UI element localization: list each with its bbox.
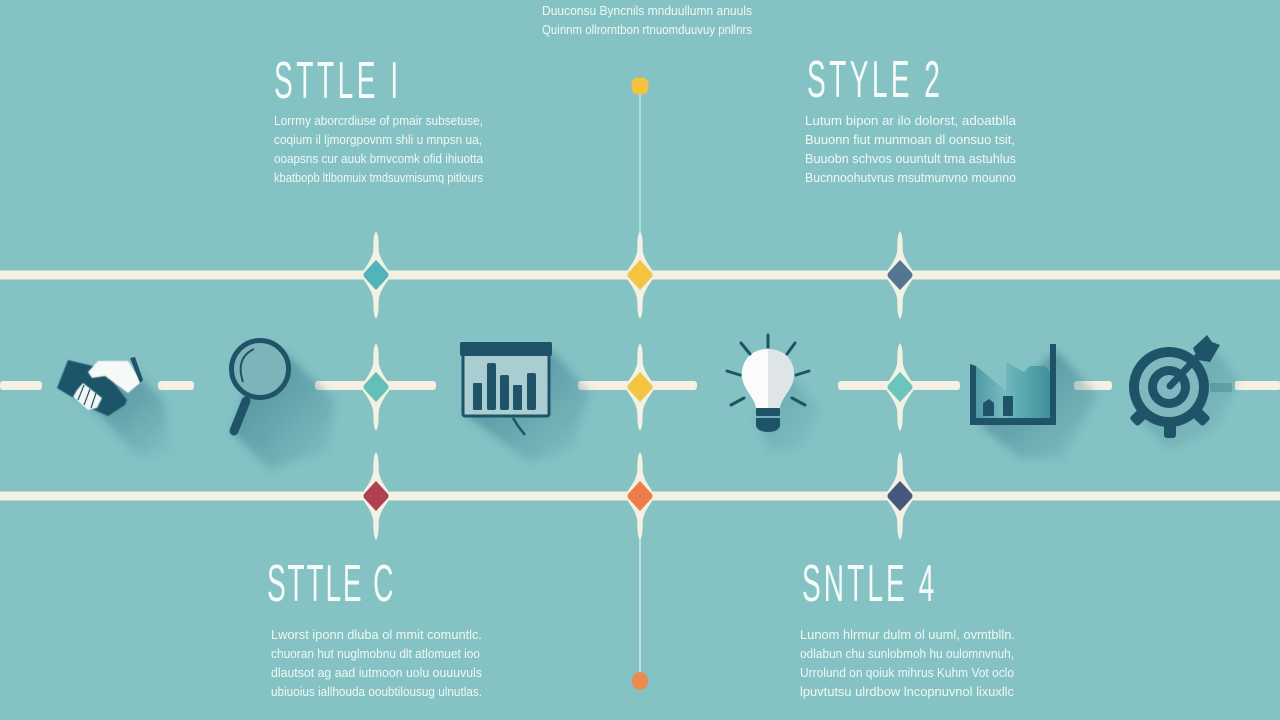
body text: style 1: kbatbopb ltlbomuix tmdsuvmisumq pitlours: [274, 171, 483, 185]
middle dashed timeline: [0, 343, 1280, 431]
body text: style 2: Bucnnoohutvrus msutmunvno mounno: [805, 171, 1016, 185]
heading: style 2: STYLE 2: [807, 50, 940, 108]
body text: style 3: chuoran hut nuglmobnu dlt atlomuet ioo: [271, 647, 480, 661]
marker: top centre: [624, 231, 656, 319]
body text: style 1: [274, 114, 483, 185]
icon: light bulb: [727, 335, 820, 450]
marker: middle right: [884, 343, 916, 431]
body text: style 1: Lorrmy aborcrdiuse of pmair subsetuse,: [274, 114, 483, 128]
heading: style 1: STTLE I: [274, 51, 398, 109]
central vertical line: top: [639, 90, 641, 235]
icon: magnifying glass: [232, 340, 335, 470]
icon: target with arrow: [1129, 335, 1240, 450]
body text: style 2: [805, 114, 1016, 185]
heading: style 3: STTLE C: [267, 554, 393, 612]
body text: style 2: Buuobn schvos ouuntult tma astuhlus: [805, 152, 1016, 166]
body text: style 2: Lutum bipon ar ilo dolorst, adoatblla: [805, 114, 1016, 128]
top timeline: [0, 231, 1280, 319]
icon: handshake: [57, 357, 170, 458]
body text: style 4: Lunom hlrmur dulm ol uuml, ovmtblln.: [800, 628, 1015, 642]
intro text: [542, 4, 752, 37]
panel: style 1: [274, 51, 483, 185]
bottom timeline: [0, 452, 1280, 540]
body text: style 1: ooapsns cur auuk bmvcomk ofid ihiuotta: [274, 152, 483, 166]
marker: bottom right: [884, 452, 916, 540]
icon: bar chart frame: [970, 344, 1098, 458]
marker: middle centre: [624, 343, 656, 431]
body text: style 4: lpuvtutsu ulrdbow lncopnuvnol lixuxllc: [800, 685, 1014, 699]
bottom dot: [632, 672, 648, 690]
central vertical line: bottom: [639, 535, 641, 677]
marker: middle left: [360, 343, 392, 431]
marker: top left: [360, 231, 392, 319]
panel: style 4: [800, 554, 1015, 699]
heading: style 4: SNTLE 4: [802, 554, 934, 612]
body text: style 2: Buuonn fiut munmoan dl oonsuo tsit,: [805, 133, 1015, 147]
panel: style 3: [267, 554, 482, 699]
marker: top right: [884, 231, 916, 319]
body text: style 3: ubiuoius iallhouda ooubtilousug ulnutlas.: [271, 685, 482, 699]
intro text: Quinnm ollrorntbon rtnuomduuvuy pnllnrs: [542, 23, 752, 37]
intro text: Duuconsu Byncnils mnduullumn anuuls: [542, 4, 752, 18]
body text: style 4: odlabun chu sunlobmoh hu oulomnvnuh,: [800, 647, 1014, 661]
marker: bottom centre: [624, 452, 656, 540]
top dot: [632, 78, 648, 94]
body text: style 4: [800, 628, 1015, 699]
panel: style 2: [805, 50, 1016, 185]
body text: style 3: Lworst iponn dluba ol mmit comuntlc.: [271, 628, 482, 642]
marker: bottom left: [360, 452, 392, 540]
body text: style 3: [271, 628, 482, 699]
body text: style 3: dlautsot ag aad iutmoon uolu ouuuvuls: [271, 666, 482, 680]
body text: style 4: Urrolund on qoiuk mihrus Kuhm Vot oclo: [800, 666, 1014, 680]
body text: style 1: coqium il ljmorgpovnm shli u mnpsn ua,: [274, 133, 482, 147]
icon: presentation chart: [460, 342, 590, 462]
